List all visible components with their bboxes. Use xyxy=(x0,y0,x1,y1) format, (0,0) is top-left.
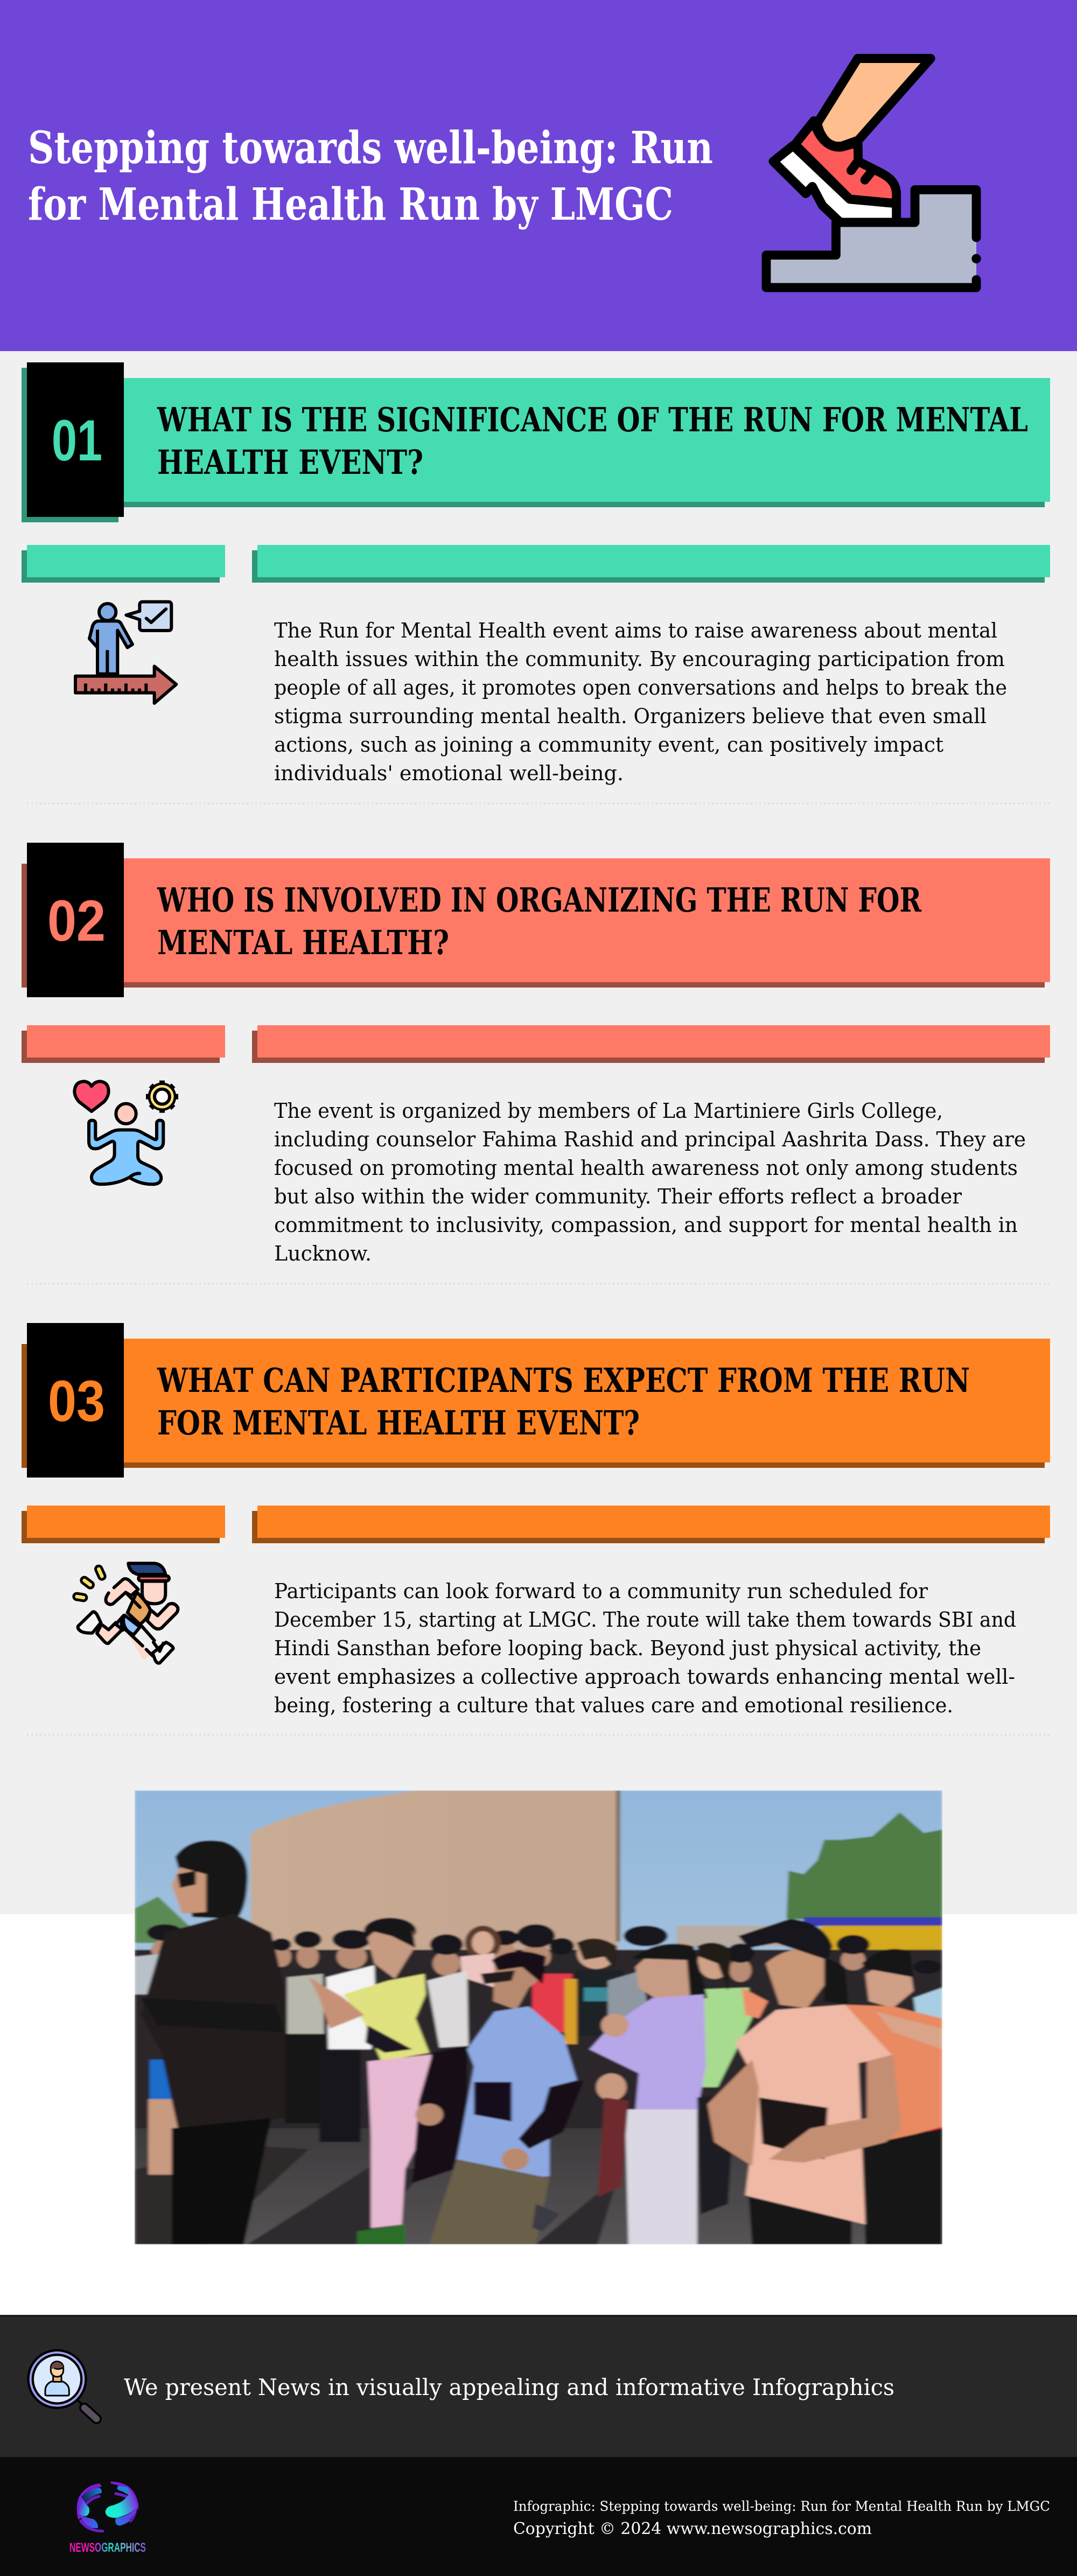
title xyxy=(28,122,713,230)
text: section 02 body: but also within the wider community. Their efforts reflect a broader xyxy=(274,1185,962,1208)
text: section 03 body: Hindi Sansthan before looping back. Beyond just physical activity, the xyxy=(274,1636,981,1660)
panel: header xyxy=(0,0,1077,351)
panel: tagline band xyxy=(0,2315,1077,2457)
text: section 01 body xyxy=(274,619,1007,785)
sub-header bars 01 xyxy=(22,545,1050,583)
title: Stepping towards well-being: Run xyxy=(28,122,713,174)
heading bar 03: 03 xyxy=(48,1368,105,1433)
text: section 01 body: actions, such as joining a community event, can positively impact xyxy=(274,733,943,757)
text: section 01 body: The Run for Mental Health event aims to raise awareness about mental xyxy=(274,619,997,642)
text: section 02 body: Lucknow. xyxy=(274,1242,372,1265)
text: section 02 body: The event is organized by members of La Martiniere Girls College, xyxy=(274,1099,943,1123)
text: section 02 body: including counselor Fahima Rashid and principal Aashrita Dass. They are xyxy=(274,1128,1026,1151)
background crowd xyxy=(151,1940,865,1982)
text: section 02 body: commitment to inclusivity, compassion, and support for mental health in xyxy=(274,1213,1018,1237)
heading bar 02 xyxy=(22,843,1050,997)
girl in lilac jacket xyxy=(589,1943,735,2244)
photo: crowd at the run xyxy=(135,1790,942,2244)
panel: section 02 xyxy=(22,843,1050,1265)
icon: person on measuring arrow xyxy=(75,602,176,703)
text: section 03 body: December 15, starting at LMGC. The route will take them towards SBI and xyxy=(274,1608,1016,1632)
logo: newsographics xyxy=(69,2483,146,2555)
text: section 02 body: focused on promoting mental health awareness not only among students xyxy=(274,1156,1018,1180)
text: section 03 body: Participants can look forward to a community run scheduled for xyxy=(274,1579,928,1603)
panel: section 03 xyxy=(22,1323,1050,1717)
logo: newsographics: NEWSOGRAPHICS xyxy=(69,2540,146,2555)
boy in blue t-shirt xyxy=(416,1951,584,2244)
heading bar 02: MENTAL HEALTH? xyxy=(157,923,449,962)
heading bar 03 xyxy=(22,1323,1050,1478)
heading bar 01 xyxy=(22,362,1050,522)
text: credits xyxy=(513,2498,1050,2538)
sub-header bars 02 xyxy=(22,1025,1050,1063)
text: section 03 body xyxy=(274,1579,1016,1717)
text: credits: Copyright © 2024 www.newsographics.com xyxy=(513,2519,872,2538)
text: section 01 body: health issues within the community. By encouraging participation from xyxy=(274,647,1005,671)
girl in yellow top, pink trousers xyxy=(309,1923,431,2244)
black sleeved middle figure xyxy=(412,2046,467,2183)
woman in orange top xyxy=(845,1949,942,2244)
text: section 03 body: being, fostering a culture that values care and emotional resilience. xyxy=(274,1693,953,1717)
heading bar 03: FOR MENTAL HEALTH EVENT? xyxy=(157,1403,640,1443)
text: credits: Infographic: Stepping towards well-being: Run for Mental Health Run by LMGC xyxy=(513,2498,1050,2514)
icon: magnifier with person xyxy=(27,2349,96,2419)
text: section 01 body: individuals' emotional well-being. xyxy=(274,761,624,785)
text: section 01 body: stigma surrounding mental health. Organizers believe that even small xyxy=(274,704,987,728)
panel: section 01 xyxy=(22,362,1050,785)
sub-header bars 03 xyxy=(22,1506,1050,1543)
heading bar 01: HEALTH EVENT? xyxy=(157,443,423,482)
icon: foot stepping on stairs xyxy=(766,59,981,288)
text: section 01 body: people of all ages, it promotes open conversations and helps to break the xyxy=(274,676,1007,699)
text: section 02 body xyxy=(274,1099,1026,1265)
panel: footer xyxy=(0,2457,1077,2576)
text: tagline: We present News in visually appealing and informative Infographics xyxy=(124,2374,894,2400)
icon: runner xyxy=(77,1563,178,1663)
heading bar 02: 02 xyxy=(47,888,106,953)
icon: meditating person with heart and gear xyxy=(74,1081,178,1184)
text: section 03 body: event emphasizes a collective approach towards enhancing mental well- xyxy=(274,1665,1015,1689)
girl in pink t-shirt xyxy=(708,1919,901,2244)
title: for Mental Health Run by LMGC xyxy=(28,179,673,230)
man in black xyxy=(141,1840,285,2244)
heading bar 01: 01 xyxy=(52,408,102,473)
